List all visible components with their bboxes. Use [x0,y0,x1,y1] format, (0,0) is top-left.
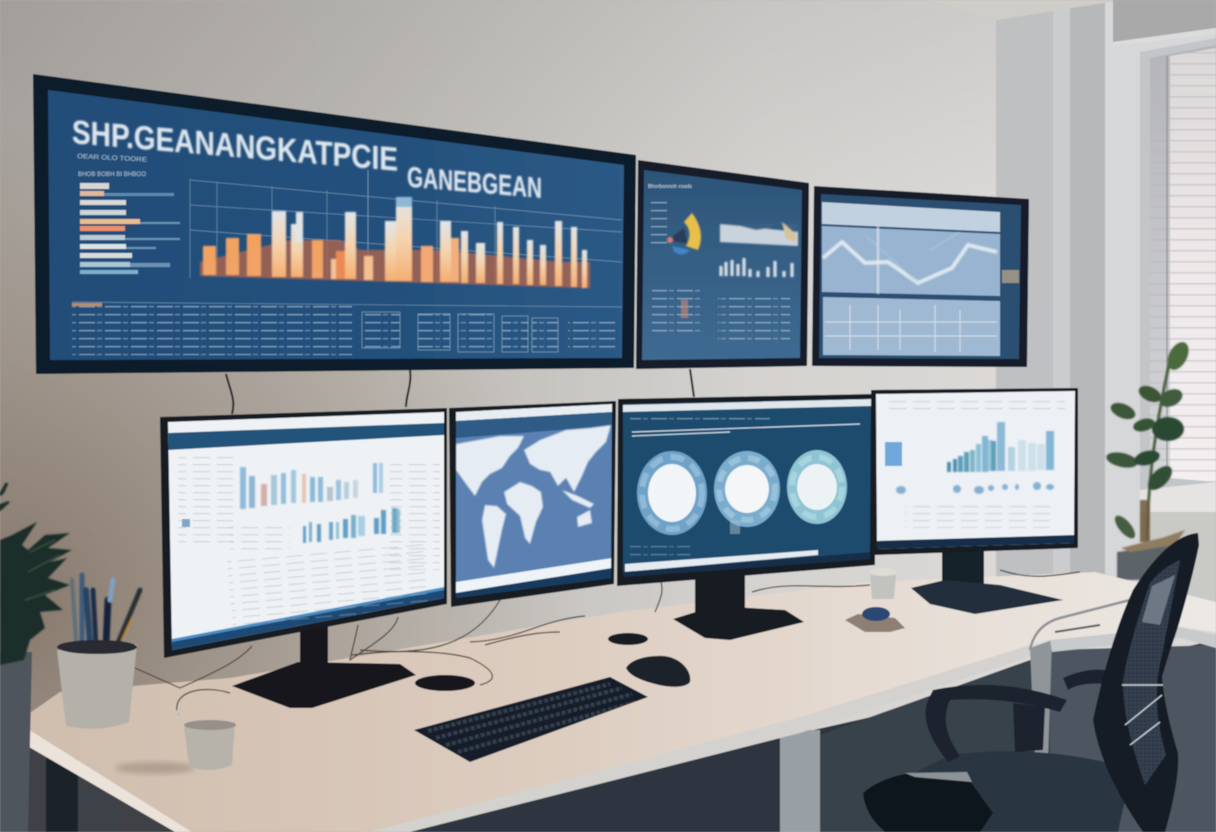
bottom strip and taskbar [625,550,818,572]
chart heading: BHOB BOBH BI BHBOO [78,172,146,178]
computer mouse [626,656,690,687]
gauge one [637,451,707,535]
pencil cup [57,575,140,729]
gauge three [787,450,847,524]
round pad near mouse [608,633,648,645]
desk [0,572,1216,832]
leaves [0,483,72,665]
header panel [822,202,1000,232]
lower monitor four [871,388,1078,555]
pale blue bars [240,463,400,543]
window with blinds [1140,38,1216,602]
lower monitor three: radial gauges [617,394,875,586]
table grid [178,455,233,545]
small text blocks: Bhorbonnoh roads [648,184,693,190]
cables under wall monitors [226,369,694,414]
wall monitor three [812,186,1029,367]
mesh backrest [1093,533,1199,832]
header text rows [629,417,771,420]
bar chart [200,197,590,288]
lower monitor four stand [911,550,1063,614]
white mug [870,568,896,599]
blue header bar [168,423,444,450]
desk cables [135,570,1080,715]
small blue glyph [182,519,190,527]
plant on the right [1105,339,1193,580]
right wall, ceiling and pillar [930,0,1216,600]
horizontal bar list [80,183,180,274]
text rows [905,506,1055,528]
lower monitor one stand [232,625,416,708]
grid lines [72,170,622,307]
title on large monitor [72,119,542,200]
mini charts [720,222,798,277]
caption under title: OEAR OLO TOORE [77,153,148,164]
title on large monitor: SHP.GEANANGKATPCIE [72,114,398,179]
shadow of small cup [115,762,195,774]
trackball and pad [845,607,905,632]
keyboard [414,677,648,762]
pot [0,652,32,832]
lower monitor one [160,408,447,658]
armrest [926,685,1067,762]
taskbar [172,588,444,652]
small paper cup [177,696,236,770]
continents [456,425,611,568]
screen top strip [456,404,612,421]
crescent chart icon [667,213,701,255]
wall monitor two [636,160,809,369]
line chart panel [822,226,1000,296]
data table [72,303,616,355]
side square [885,442,902,466]
small text blocks [648,184,790,342]
screen bottom strip [456,558,612,593]
bar chart [947,422,1054,472]
large wall monitor [33,74,636,374]
pencils [72,575,140,645]
plant on the left [0,483,72,832]
office chair [863,533,1199,832]
lower monitor two: world map [449,401,616,607]
round pad by keyboard [415,675,475,691]
lower monitor three stand [673,575,804,640]
scatter dots [896,482,1054,494]
lower chart panel [823,297,1000,356]
tan reflection [1002,270,1019,283]
seat [910,751,1125,832]
gauge two [714,451,780,527]
title on large monitor: GANEBGEAN [407,162,542,205]
